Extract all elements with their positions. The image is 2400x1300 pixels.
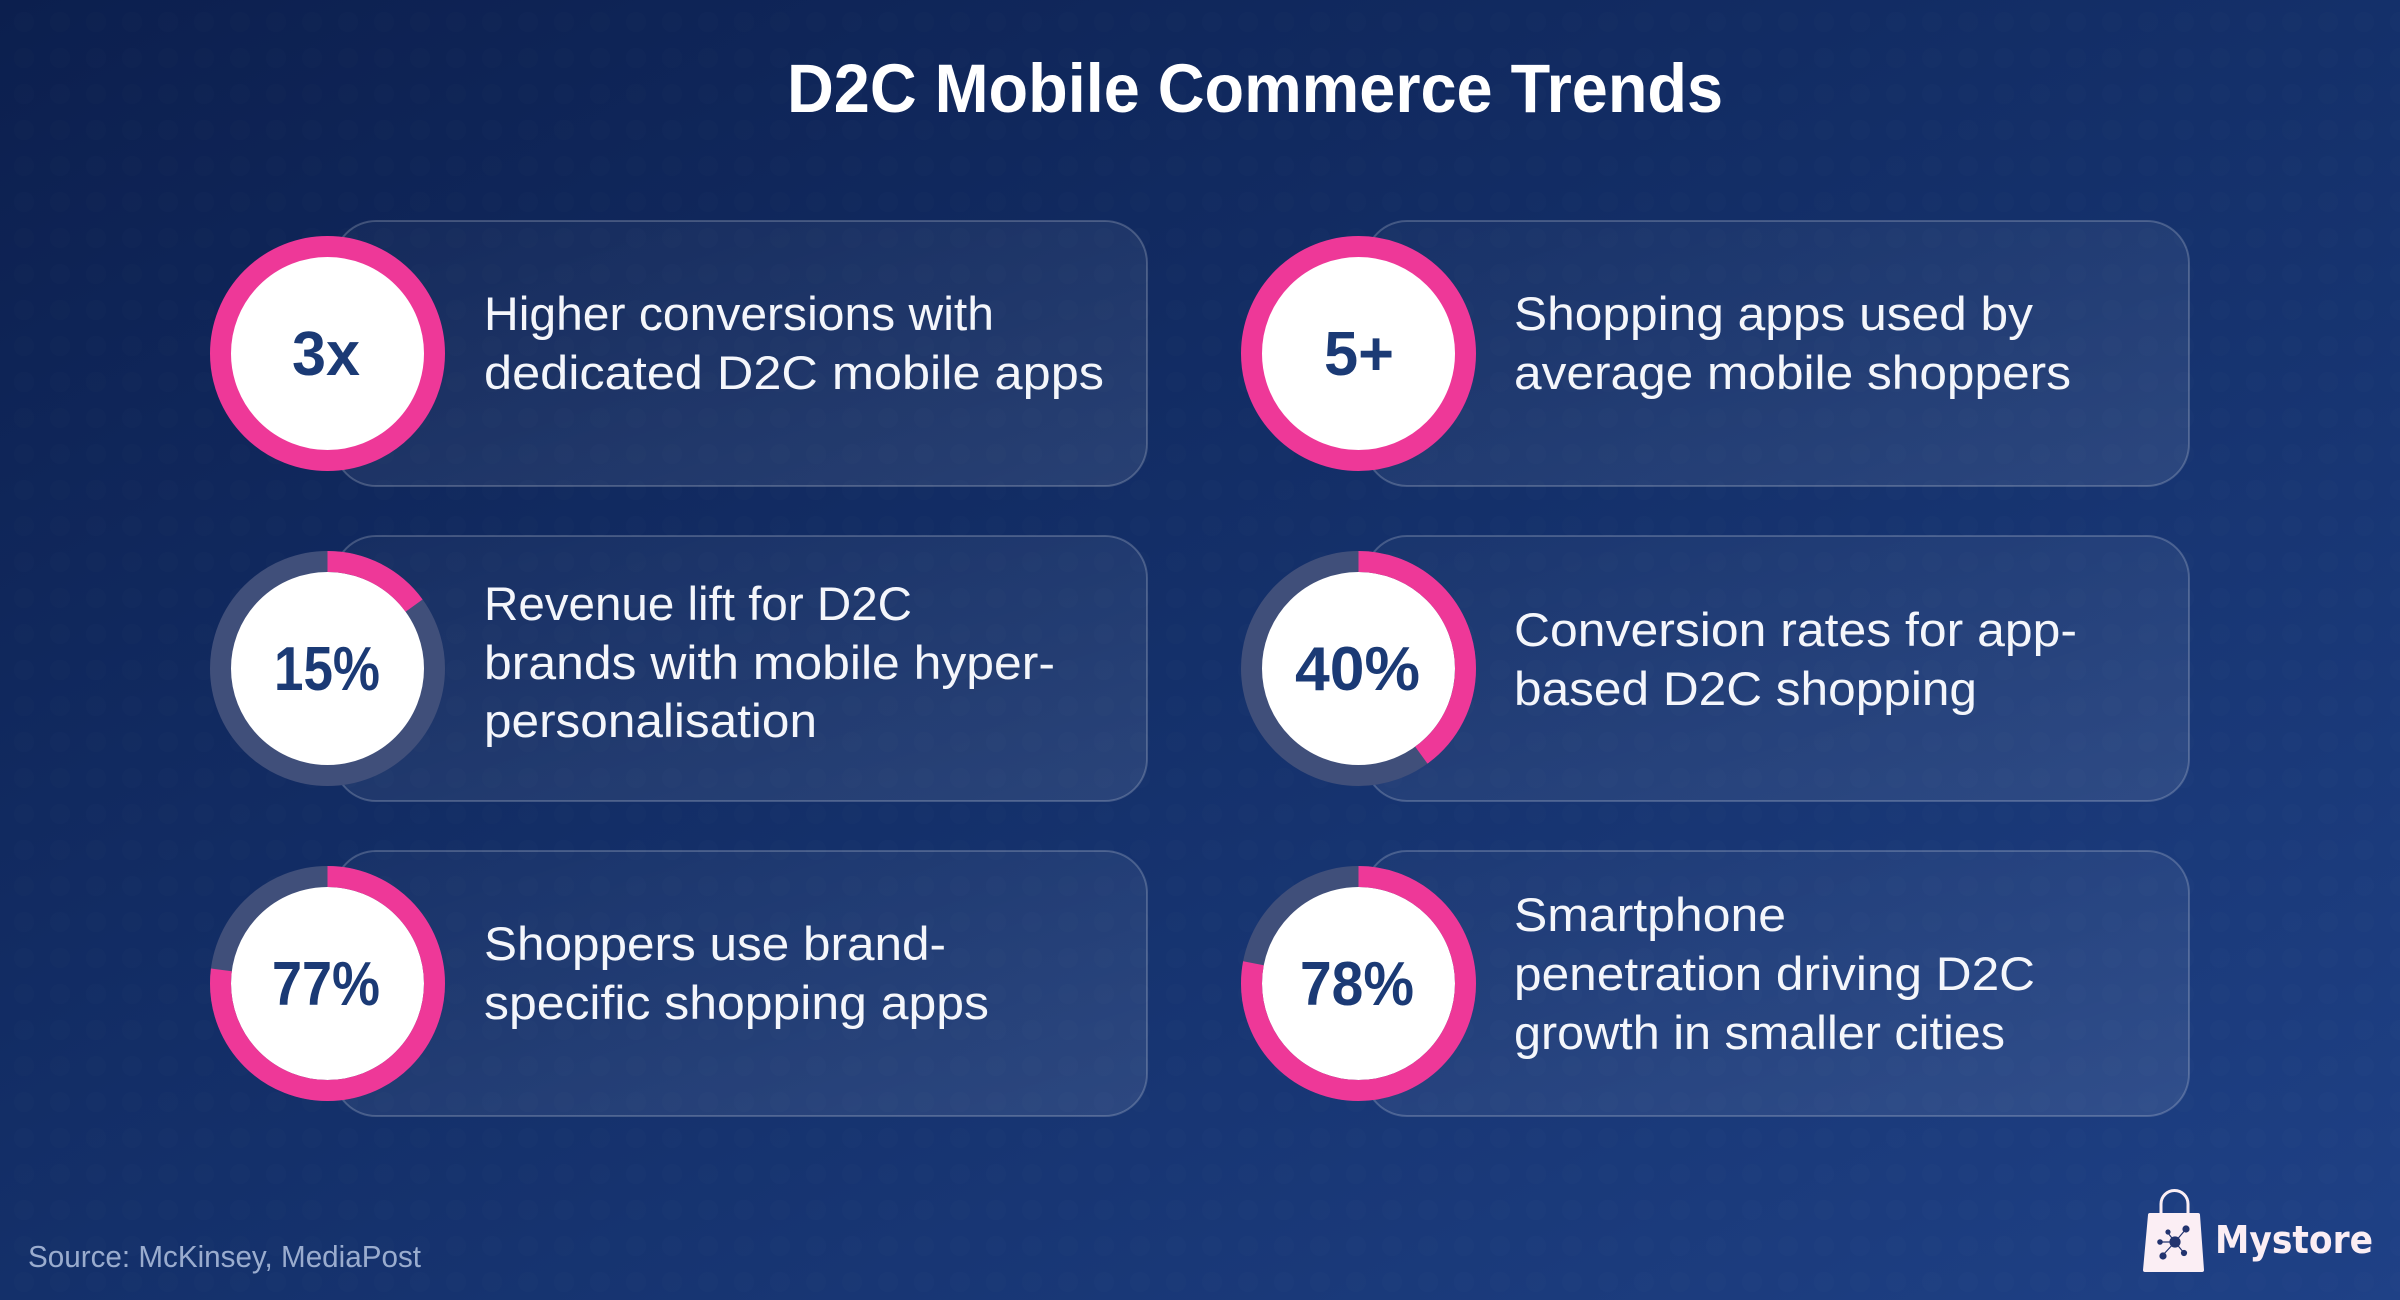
donut ring: 15% xyxy=(220,562,434,776)
description: dedicated D2C mobile apps xyxy=(484,346,1104,399)
card background xyxy=(334,536,1147,801)
description xyxy=(1514,603,2077,715)
description xyxy=(1514,888,2035,1059)
description: based D2C shopping xyxy=(1514,662,1977,715)
stat: 15%: 15% xyxy=(274,635,380,704)
stat: 77%: 77% xyxy=(272,950,380,1019)
description: Higher conversions with xyxy=(484,287,994,340)
card background xyxy=(1365,536,2189,801)
description: Conversion rates for app- xyxy=(1514,603,2077,656)
panel: 3x higher conversions xyxy=(220,221,1147,486)
panel: 5+ shopping apps xyxy=(1252,221,2189,486)
description xyxy=(484,917,989,1029)
panel: 77% brand-specific apps xyxy=(220,851,1147,1116)
donut ring: 100% xyxy=(220,246,434,460)
description: personalisation xyxy=(484,694,817,747)
donut ring: 78% xyxy=(1252,876,1466,1090)
panel: 40% conversion rates xyxy=(1252,536,2189,801)
card background xyxy=(1365,221,2189,486)
description: growth in smaller cities xyxy=(1514,1006,2005,1059)
description xyxy=(484,287,1104,399)
logo: Mystore xyxy=(2143,1190,2373,1272)
source note: Source: McKinsey, MediaPost xyxy=(28,1239,421,1274)
card background xyxy=(1365,851,2189,1116)
description: Shopping apps used by xyxy=(1514,287,2034,340)
stat: 5+: 5+ xyxy=(1324,320,1394,389)
donut ring: 100% xyxy=(1252,246,1466,460)
description: average mobile shoppers xyxy=(1514,346,2071,399)
description xyxy=(1514,287,2071,399)
stat: 78%: 78% xyxy=(1300,950,1414,1019)
card background xyxy=(334,851,1147,1116)
title: D2C Mobile Commerce Trends xyxy=(787,50,1723,127)
panel: 78% smartphone penetration xyxy=(1252,851,2189,1116)
icon: shopping bag xyxy=(2143,1190,2204,1272)
card background xyxy=(334,221,1147,486)
description: brands with mobile hyper- xyxy=(484,636,1055,689)
description: Revenue lift for D2C xyxy=(484,577,912,630)
panel: 15% revenue lift xyxy=(220,536,1147,801)
donut ring: 77% xyxy=(220,876,434,1090)
donut ring: 40% xyxy=(1252,562,1466,776)
description: penetration driving D2C xyxy=(1514,947,2035,1000)
description xyxy=(484,577,1055,747)
description: Smartphone xyxy=(1514,888,1786,941)
stat: 40%: 40% xyxy=(1295,635,1420,704)
description: specific shopping apps xyxy=(484,976,989,1029)
stat: 3x: 3x xyxy=(292,320,361,389)
description: Shoppers use brand- xyxy=(484,917,946,970)
wordmark: Mystore xyxy=(2215,1218,2373,1262)
